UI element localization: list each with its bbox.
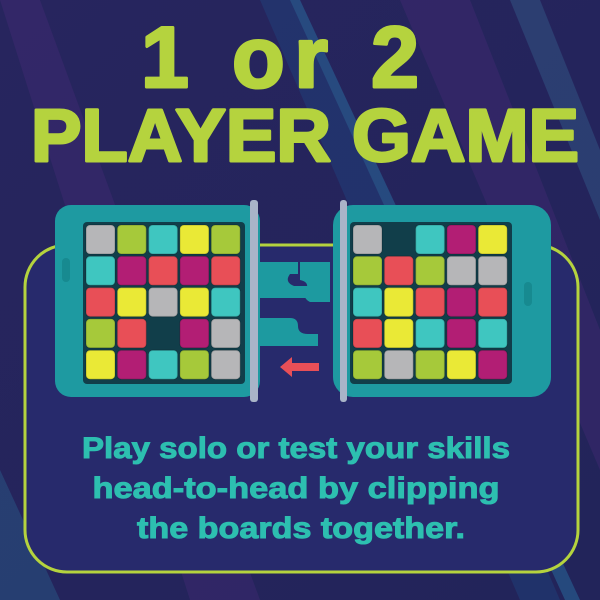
right board	[333, 200, 551, 402]
left board	[55, 200, 260, 402]
description text: Play solo or test your skills	[82, 432, 510, 465]
panel: description	[25, 245, 578, 572]
description text: head-to-head by clipping	[92, 472, 500, 505]
title	[31, 10, 579, 177]
title: 1 or 2	[141, 10, 419, 106]
title: PLAYER GAME	[31, 94, 579, 177]
arrow: clip together	[280, 357, 319, 377]
description text	[82, 432, 510, 545]
description text: the boards together.	[137, 512, 465, 545]
connector pieces	[260, 262, 330, 346]
